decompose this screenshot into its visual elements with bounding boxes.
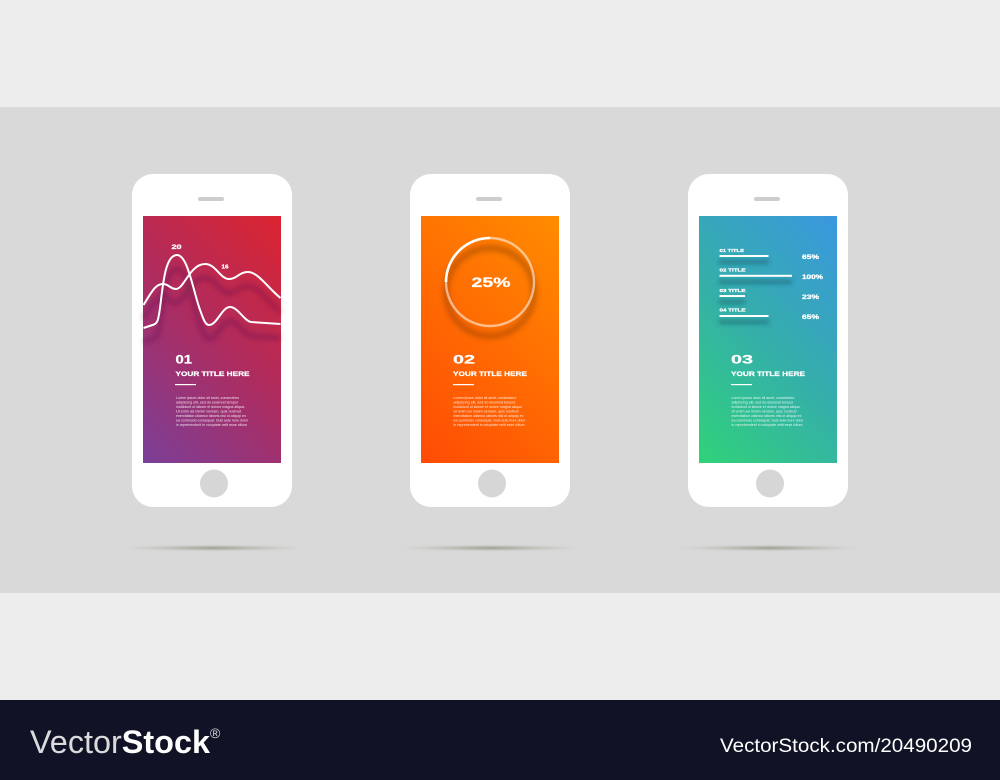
bar 03 [720,288,820,301]
body text: Ut enim ad minim veniam, quis nostrud [176,408,241,414]
number 03: 03 [731,352,754,366]
body text: in reprehenderit in voluptate velit esse cillum [454,422,524,427]
label 20: 20 [172,245,182,251]
bar 02: 02 TITLE [720,268,746,272]
bar 02 [720,268,824,281]
ground shadow [121,546,305,550]
image id: VectorStock.com/20490209 [720,736,972,757]
screen [143,216,281,463]
registered mark: ® [210,725,221,741]
body text [176,395,249,427]
body text: ea commodo consequat. Duis aute irure dolor [176,418,249,422]
bar 02: 100% [802,275,824,281]
line series B [144,255,280,328]
body text: incididunt ut labore et dolore magna aliqua. [454,404,522,409]
line chart [144,245,280,342]
body text: exercitation ullamco laboris nisi ut aliquip ex [176,413,246,418]
body text: adipiscing elit, sed do eiusmod tempor [732,400,794,404]
body text: adipiscing elit, sed do eiusmod tempor [454,400,516,404]
ground shadow [399,546,583,550]
body text: Ut enim ad minim veniam, quis nostrud [454,408,518,414]
donut chart 25% [446,238,534,336]
body text: Ut enim ad minim veniam, quis nostrud [732,408,796,414]
body text [732,395,804,427]
body text: ea commodo consequat. Duis aute irure dolor [454,418,526,422]
percent label: 25% [472,274,511,290]
speaker [754,197,780,201]
body text: exercitation ullamco laboris nisi ut aliquip ex [732,413,802,418]
bar chart [719,248,824,324]
body text: exercitation ullamco laboris nisi ut aliquip ex [454,413,524,418]
phone body [688,174,848,507]
body text: incididunt ut labore et dolore magna aliqua. [176,404,245,409]
title: YOUR TITLE HERE [176,371,250,378]
bar 01: 01 TITLE [720,248,744,253]
bar 03: 03 TITLE [720,288,746,293]
underline [453,384,474,385]
bar 04: 65% [802,315,820,321]
speaker [198,197,224,201]
label 16: 16 [222,264,228,270]
underline [731,384,752,385]
ring track [446,238,534,326]
number 01: 01 [176,352,192,366]
line series A [144,264,280,305]
bar 01 [720,248,820,261]
screen [421,216,559,463]
speaker [476,197,502,201]
ring progress [446,238,490,282]
ground shadow [677,546,861,550]
VectorStock logo: VectorStock [30,724,211,760]
body text: Lorem ipsum dolor sit amet, consectetur [176,395,240,400]
body text: Lorem ipsum dolor sit amet, consectetur [732,395,795,400]
bar 04: 04 TITLE [720,308,746,312]
phone body [410,174,570,507]
home button [478,470,506,498]
underline [175,384,196,385]
bar 01: 65% [802,255,820,261]
home button [756,470,784,498]
title: YOUR TITLE HERE [453,371,528,378]
body text: in reprehenderit in voluptate velit esse cillum [176,422,247,427]
title: YOUR TITLE HERE [731,371,806,378]
body text: adipiscing elit, sed do eiusmod tempor [176,400,239,404]
watermark bar [0,700,1000,780]
panel: phone 03 [677,174,861,550]
phone body [132,174,292,507]
home button [200,470,228,498]
number 02: 02 [453,352,476,366]
body text [454,395,526,427]
body text: ea commodo consequat. Duis aute irure dolor [732,418,804,422]
body text: incididunt ut labore et dolore magna aliqua. [732,404,800,409]
body text: in reprehenderit in voluptate velit esse cillum [732,422,802,427]
bar 03: 23% [802,295,820,301]
bar 04 [720,308,820,321]
body text: Lorem ipsum dolor sit amet, consectetur [454,395,517,400]
panel: phone 01 [121,174,305,550]
panel: phone 02 [399,174,583,550]
screen [699,216,837,463]
